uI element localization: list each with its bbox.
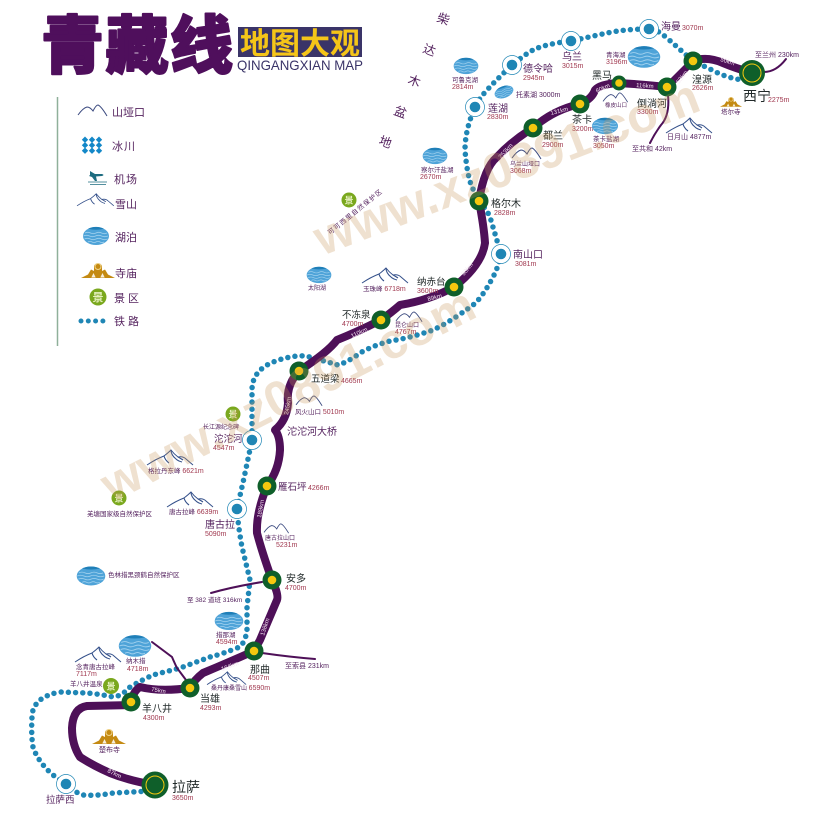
station: 黑马	[592, 70, 626, 90]
distance labels on the line: 110km	[350, 327, 369, 340]
station: 羊八井: 4300m	[143, 715, 165, 722]
lake: 察尔汗盐湖: 2670m	[420, 174, 442, 181]
station: 那曲	[244, 642, 270, 682]
temple: 楚布寺	[92, 729, 126, 754]
snow mountain: 唐古拉峰	[167, 492, 218, 516]
temple: 塔尔寺	[720, 97, 742, 116]
legend: glacier	[82, 136, 136, 154]
label: Qaidam Basin	[377, 11, 452, 151]
pass: 乌兰山垭口: 3068m	[510, 168, 532, 175]
station: 纳赤台: 纳赤台	[417, 276, 446, 288]
label: Qaidam Basin: 柴	[435, 11, 452, 28]
terminal: 拉萨: 3650m	[172, 795, 194, 802]
legend: railway	[81, 315, 142, 328]
rail stop: 乌兰	[562, 32, 584, 70]
terminal: 西宁	[739, 60, 790, 104]
lake: 措那湖: 4594m	[216, 639, 238, 646]
rail stop: 德令哈: 2945m	[523, 75, 545, 82]
pass: 唐古拉山口: 5231m	[276, 542, 298, 549]
station: 茶卡: 3200m	[572, 126, 594, 133]
snow mountain: 唐古拉峰: 唐古拉峰 6639m	[169, 507, 218, 516]
distance labels on the line: 164km	[221, 661, 240, 673]
snow mountain: 格拉丹东峰: 格拉丹东峰 6621m	[148, 466, 204, 475]
pass: 昆仑山口	[395, 312, 422, 336]
legend: lake	[83, 227, 137, 245]
station: 都兰: 2900m	[542, 142, 564, 149]
station: 五道梁	[290, 362, 363, 385]
distance labels on the line: 253km	[498, 143, 515, 160]
route: main Qinghai-Tibet railway line	[72, 59, 752, 785]
distance labels on the line: 90km	[461, 262, 475, 277]
lake: 茶卡盐湖: 茶卡盐湖	[593, 134, 620, 143]
snow mountain: 念青唐古拉峰: 7117m	[76, 671, 97, 678]
snow mountain: 念青唐古拉峰: 念青唐古拉峰	[76, 662, 116, 671]
temple: 楚布寺: 楚布寺	[99, 745, 120, 754]
station: 纳赤台: 3600m	[417, 288, 439, 295]
distance labels on the line: 75km	[151, 687, 166, 696]
station: 都兰: 都兰	[543, 129, 563, 142]
legend: airport: 机场	[114, 172, 138, 186]
pass: 唐古拉山口: 唐古拉山口	[265, 534, 295, 542]
station: 雁石坪: 4266m	[308, 485, 330, 492]
legend: scenic area: 景	[92, 291, 104, 304]
pass: 橡皮山口: 橡皮山口	[605, 101, 627, 109]
station: 不冻泉: 4700m	[342, 321, 364, 328]
distance labels on the line	[106, 57, 735, 780]
distance labels on the line: 131km	[550, 107, 569, 117]
station: 黑马: 黑马	[592, 70, 612, 82]
distance labels on the line: 89km	[427, 294, 443, 303]
legend: airport	[88, 171, 138, 186]
rail stop: 拉萨西: 拉萨西	[46, 794, 75, 806]
scenic: 羊八井温泉: 景	[106, 682, 116, 692]
rail stop: 莲湖: 2830m	[487, 114, 509, 121]
station: 安多: 安多	[286, 572, 306, 585]
station: 当雄: 当雄	[200, 692, 220, 705]
rail stop: 海曼: 海曼	[661, 20, 681, 33]
lake: 纳木措	[119, 635, 151, 673]
lake: 托素湖	[493, 83, 561, 101]
scenic: 长江源纪念碑: 景	[228, 410, 238, 420]
legend: snow mountain	[77, 194, 137, 211]
temple: 塔尔寺: 塔尔寺	[721, 107, 741, 116]
snow mountain: 桑丹康桑雪山: 桑丹康桑雪山 6590m	[211, 684, 270, 692]
snow mountain: 桑丹康桑雪山	[207, 672, 270, 692]
label: Qaidam Basin: 盆	[392, 104, 409, 121]
label: Qaidam Basin: 地	[377, 134, 394, 151]
legend: scenic area: 景区	[114, 292, 142, 305]
station: 湟源: 2626m	[692, 85, 714, 92]
destination: 至共和: 至共和 42km	[632, 144, 672, 153]
station: 倒淌河: 倒淌河	[637, 97, 667, 110]
terminal: 拉萨: 拉萨	[172, 779, 200, 795]
terminal: 拉萨	[142, 772, 200, 802]
snow mountain: 念青唐古拉峰	[75, 647, 121, 678]
distance labels on the line: 53km	[676, 70, 690, 85]
rail stop: 唐古拉: 唐古拉	[205, 518, 235, 531]
snow mountain: 格拉丹东峰	[147, 450, 204, 475]
distance labels on the line: 116km	[636, 83, 654, 90]
scenic: 可可西里自然保护区: 景	[344, 196, 354, 206]
lake: 察尔汗盐湖: 察尔汗盐湖	[421, 165, 454, 174]
station: 格尔木: 格尔木	[491, 197, 521, 210]
label: Qaidam Basin: 木	[406, 73, 423, 90]
distance labels on the line: 50km	[719, 57, 735, 67]
rail stop: 德令哈	[502, 56, 553, 82]
destination: 至索县: 至索县 231km	[285, 661, 329, 670]
snow mountain: 日月山: 日月山 4877m	[667, 132, 712, 141]
lake: 可鲁克湖: 2814m	[452, 84, 474, 91]
station: 倒淌河: 3300m	[637, 109, 659, 116]
lake: 色林措 reserve: 色林措黑颈鹤自然保护区	[108, 570, 180, 579]
snow mountain: 玉珠峰	[362, 268, 408, 293]
station: 茶卡	[570, 94, 594, 133]
legend: temple	[81, 263, 137, 280]
station: 湟源: 湟源	[692, 73, 712, 86]
rail stop: 沱沱河: 4547m	[213, 445, 235, 452]
lake: 青海湖	[606, 46, 660, 68]
subtitle: QINGANGXIAN MAP: QINGANGXIAN MAP	[237, 57, 363, 73]
station: 雁石坪	[258, 476, 330, 496]
rail stop: 乌兰: 3015m	[562, 63, 584, 70]
lake: 可鲁克湖: 可鲁克湖	[452, 75, 478, 84]
pass: 橡皮山口	[603, 93, 628, 109]
watermark: lower: www.xz0891.com	[91, 276, 484, 513]
rail stop: 唐古拉: 5090m	[205, 531, 227, 538]
station: 都兰	[524, 118, 564, 149]
pass: 风火山口	[295, 396, 344, 416]
snow mountain: 日月山	[666, 118, 712, 141]
scenic: 可可西里自然保护区: 可可西里自然保护区	[326, 187, 384, 237]
station: 雁石坪: 雁石坪	[278, 481, 307, 493]
distance labels on the line: 189km	[257, 500, 266, 518]
pass: 昆仑山口: 昆仑山口	[395, 321, 419, 329]
distance labels on the line: 60km	[595, 83, 611, 95]
station: 羊八井: 羊八井	[142, 702, 172, 715]
station: 安多: 4700m	[285, 585, 307, 592]
station: 格尔木	[470, 192, 521, 217]
scenic: 羌塘国家级自然保护区	[87, 490, 152, 518]
lake: 措那湖: 措那湖	[216, 630, 236, 639]
station: 当雄	[180, 678, 222, 712]
distance labels on the line: 245km	[284, 397, 293, 415]
lake: 太阳湖: 太阳湖	[308, 284, 326, 292]
legend: mountain pass	[78, 105, 145, 119]
lake: 色林措 reserve	[77, 566, 180, 585]
pass: 唐古拉山口	[264, 524, 298, 549]
station: 五道梁: 4665m	[341, 378, 363, 385]
pass: 乌兰山垭口	[510, 148, 541, 175]
rail stop: 南山口: 南山口	[513, 248, 543, 261]
station: 倒淌河	[637, 78, 676, 116]
rail stop: 唐古拉	[205, 500, 246, 538]
lake: 措那湖	[215, 612, 243, 646]
rail stop: 海曼: 3070m	[682, 25, 704, 32]
scenic: 羊八井温泉: 羊八井温泉	[70, 679, 103, 688]
station: 那曲: 那曲	[250, 664, 270, 676]
pass: 昆仑山口: 4767m	[395, 329, 417, 336]
station: 茶卡: 茶卡	[572, 113, 592, 126]
rail stop: 莲湖: 莲湖	[488, 103, 508, 115]
distance labels on the line: 87km	[106, 768, 122, 780]
legend: mountain pass: 山垭口	[112, 106, 145, 119]
title: 青藏线: 青藏线	[41, 12, 233, 82]
legend: temple: 寺庙	[115, 266, 137, 280]
terminal: 西宁: 西宁	[743, 88, 771, 104]
scenic: 长江源纪念碑	[203, 406, 240, 431]
lake: 茶卡盐湖	[592, 118, 620, 150]
station: 不冻泉	[342, 309, 390, 330]
lake: 可鲁克湖	[452, 58, 478, 91]
scenic: 羌塘国家级自然保护区: 羌塘国家级自然保护区	[87, 509, 152, 518]
lake: 青海湖: 青海湖	[606, 50, 626, 59]
distance labels on the line: 138km	[260, 618, 271, 637]
rail stop: 南山口: 3081m	[515, 261, 537, 268]
label: Qaidam Basin: 达	[421, 42, 438, 59]
station: 格尔木: 2828m	[494, 210, 516, 217]
terminal: 西宁: 2275m	[768, 97, 790, 104]
legend panel	[58, 97, 145, 346]
scenic: 长江源纪念碑: 长江源纪念碑	[203, 423, 239, 431]
route: branch lines	[152, 59, 786, 680]
station: 五道梁: 五道梁	[311, 373, 340, 385]
legend: scenic area	[90, 288, 142, 306]
station: 羊八井	[122, 692, 172, 722]
lake: 托素湖: 托素湖 3000m	[516, 90, 561, 99]
station: 湟源	[684, 52, 714, 92]
station: 纳赤台	[417, 276, 464, 296]
lake: 纳木措: 纳木措	[126, 656, 146, 665]
rail stop: 海曼	[640, 20, 704, 38]
legend: glacier: 冰川	[112, 140, 136, 153]
rail stop: 乌兰: 乌兰	[562, 50, 582, 63]
destination: 至382道班: 至 382 道班 316km	[187, 595, 242, 604]
scenic: 羊八井温泉	[70, 678, 119, 694]
scenic: 羌塘国家级自然保护区: 景	[114, 494, 124, 504]
lake: 纳木措: 4718m	[127, 666, 149, 673]
snow mountain: 玉珠峰: 玉珠峰 6718m	[363, 284, 406, 293]
watermark: upper: www.xz0891.com	[305, 68, 707, 267]
station: 那曲: 4507m	[248, 675, 270, 682]
destination: 至兰州: 至兰州 230km	[755, 50, 799, 59]
subtitle box: 地图大观: 地图大观	[240, 28, 360, 61]
lake: 察尔汗盐湖	[420, 148, 454, 181]
station: 当雄: 4293m	[200, 705, 222, 712]
lake: 太阳湖	[307, 267, 331, 292]
legend: lake: 湖泊	[115, 231, 137, 244]
lake: 青海湖: 3196m	[606, 59, 628, 66]
pass: 乌兰山垭口: 乌兰山垭口	[510, 160, 540, 168]
rail stop: 沱沱河	[213, 430, 262, 452]
station: 安多	[262, 570, 307, 592]
legend: snow mountain: 雪山	[115, 198, 137, 211]
rail stop: 南山口	[492, 244, 543, 268]
rail stop: 拉萨西	[46, 774, 76, 806]
pass: 风火山口: 风火山口 5010m	[295, 407, 344, 416]
lake: 茶卡盐湖: 3050m	[593, 143, 615, 150]
rail stop: 德令哈: 德令哈	[523, 62, 553, 75]
label: 沱沱河大桥: 沱沱河大桥	[287, 425, 337, 438]
rail stop: 沱沱河: 沱沱河	[214, 433, 243, 445]
legend: railway: 铁路	[114, 315, 142, 328]
rail stop: 莲湖	[466, 98, 509, 121]
station: 不冻泉: 不冻泉	[342, 309, 371, 321]
